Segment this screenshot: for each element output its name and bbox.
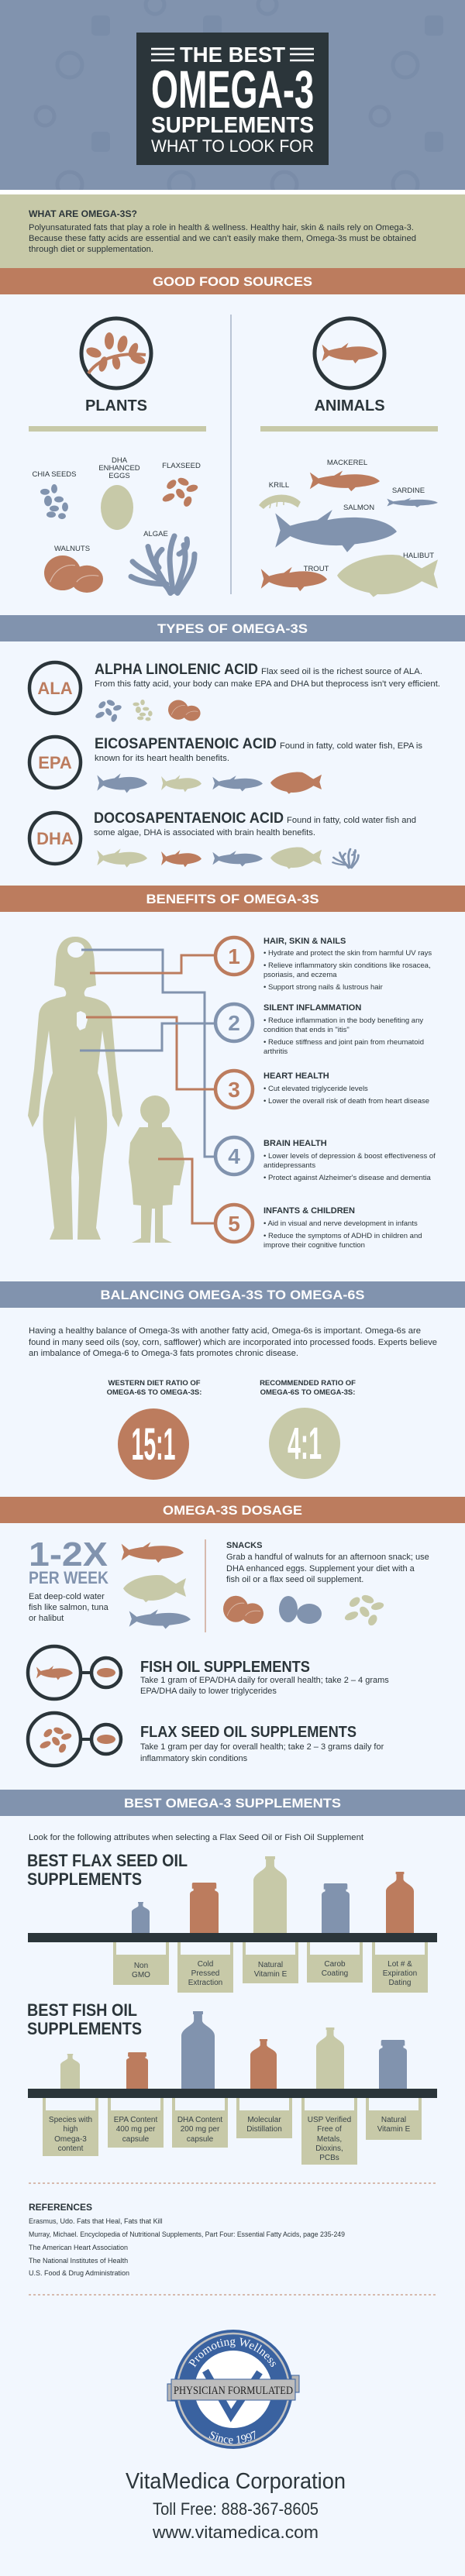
fish oil supplements: Take 1 gram of EPA/DHA daily for overall health; take 2 – 4 grams xyxy=(140,1676,389,1685)
shelf: best fish oil supplements: Dioxins, xyxy=(315,2144,343,2153)
dosage: snacks: fish oil or a flax seed oil supplement. xyxy=(226,1575,363,1584)
flax seed oil supplements xyxy=(28,1713,384,1766)
panel: animals: SARDINE xyxy=(392,487,425,495)
dosage: snacks: SNACKS xyxy=(226,1541,262,1550)
shelf: best fish oil supplements: USP Verified xyxy=(308,2116,351,2124)
dosage: fish per week: PER WEEK xyxy=(29,1568,108,1587)
panel: plants: CHIA SEEDS xyxy=(32,470,77,479)
balancing paragraph: Having a healthy balance of Omega-3s with another fatty acid, Omega-6s is important. Omega-6s are xyxy=(29,1326,421,1336)
intro: what are omega-3s: Because these fatty acids are essential and we can't easily make them, Omega-3s must be obtained xyxy=(29,234,416,243)
panel: plants xyxy=(29,318,206,593)
ratio: western diet: OMEGA-6S TO OMEGA-3S: xyxy=(107,1388,202,1397)
benefit 1: hair skin nails: HAIR, SKIN & NAILS xyxy=(264,937,346,946)
connector lines xyxy=(80,950,217,1223)
flax seed oil supplements: inflammatory skin conditions xyxy=(140,1754,248,1763)
title box: WHAT TO LOOK FOR xyxy=(151,136,314,156)
benefit 4: brain health: • Lower levels of depression & boost effectiveness of xyxy=(264,1152,436,1161)
icon: plant circle xyxy=(81,318,151,388)
benefit 5: infants & children xyxy=(215,1205,422,1250)
benefit 3: heart health: • Cut elevated triglyceride levels xyxy=(264,1085,368,1093)
type: DHA: DOCOSAPENTAENOIC ACID xyxy=(94,810,284,827)
shelf: best flax seed oil supplements: Carob xyxy=(324,1960,346,1969)
dosage: fish per week: or halibut xyxy=(29,1614,64,1623)
heading: types of omega-3s: TYPES OF OMEGA-3S xyxy=(157,621,308,636)
shelf: best fish oil supplements: Vitamin E xyxy=(377,2125,411,2134)
benefit 4: brain health: • Protect against Alzheimer's disease and dementia xyxy=(264,1174,432,1182)
footer: company contact: www.vitamedica.com xyxy=(152,2523,319,2542)
benefit 4: brain health: 4 xyxy=(228,1144,240,1168)
dosage: snacks: DHA enhanced eggs. Supplement your diet with a xyxy=(226,1564,415,1573)
heading: best omega-3 supplements: BEST OMEGA-3 SUPPLEMENTS xyxy=(124,1796,341,1811)
panel: animals: KRILL xyxy=(269,481,289,490)
panel: animals: HALIBUT xyxy=(403,552,434,560)
benefit 2: silent inflammation: condition that ends in "itis" xyxy=(264,1026,350,1034)
benefit 5: infants & children: 5 xyxy=(228,1212,240,1236)
references: The American Heart Association xyxy=(29,2244,128,2251)
ratio: western diet xyxy=(107,1379,202,1480)
shelf: best fish oil supplements: capsule xyxy=(122,2135,150,2144)
balancing paragraph: an imbalance of Omega-6 to Omega-3 fats promotes chronic disease. xyxy=(29,1349,298,1358)
type: EPA: Found in fatty, cold water fish, EPA is xyxy=(280,741,423,751)
benefit 1: hair skin nails xyxy=(215,937,432,992)
heading: good food sources: GOOD FOOD SOURCES xyxy=(153,274,312,289)
type: DHA: Found in fatty, cold water fish and xyxy=(287,816,416,825)
heading: types of omega-3s xyxy=(0,615,465,641)
panel: plants: ENHANCED xyxy=(98,464,140,473)
panel: plants: DHA xyxy=(112,456,128,465)
icon: heart xyxy=(77,1011,88,1030)
benefit 5: infants & children: • Aid in visual and nerve development in infants xyxy=(264,1219,418,1228)
heading: dosage: OMEGA-3S DOSAGE xyxy=(163,1503,302,1518)
logo: physician formulated seal: PHYSICIAN FORMULATED xyxy=(174,2385,293,2397)
logo: physician formulated seal: Promoting Wellness xyxy=(188,2337,276,2368)
type: DHA xyxy=(29,810,416,869)
references: Erasmus, Udo. Fats that Heal, Fats that Kill xyxy=(29,2217,163,2225)
benefit 3: heart health: HEART HEALTH xyxy=(264,1071,329,1081)
panel: animals xyxy=(260,318,438,597)
benefit 2: silent inflammation: • Reduce stiffness and joint pain from rheumatoid xyxy=(264,1038,424,1047)
shelf: best fish oil supplements: Molecular xyxy=(247,2116,281,2124)
benefit 2: silent inflammation xyxy=(215,1003,424,1056)
type: ALA: From this fatty acid, your body can make EPA and DHA but theprocess isn't very efficient. xyxy=(95,679,440,689)
shelf: best flax seed oil supplements: SUPPLEMENTS xyxy=(27,1869,142,1889)
benefit 5: infants & children: • Reduce the symptoms of ADHD in children and xyxy=(264,1232,422,1240)
type: DHA: DHA xyxy=(36,829,74,848)
heading: good food sources xyxy=(0,268,465,294)
references: Murray, Michael. Encyclopedia of Nutritional Supplements, Part Four: Essential Fatty Acids, page 235-249 xyxy=(29,2230,345,2238)
flax seed oil supplements: FLAX SEED OIL SUPPLEMENTS xyxy=(140,1724,356,1741)
shelf: best fish oil supplements: capsule xyxy=(187,2135,214,2144)
shelf: best flax seed oil supplements: BEST FLAX SEED OIL xyxy=(27,1851,188,1870)
header banner xyxy=(0,0,465,197)
panel: plants: WALNUTS xyxy=(54,545,90,553)
dosage: fish per week: 1-2X xyxy=(29,1536,108,1573)
shelf: best fish oil supplements xyxy=(27,2000,437,2165)
panel: animals: ANIMALS xyxy=(314,397,385,414)
references: U.S. Food & Drug Administration xyxy=(29,2269,129,2277)
references xyxy=(29,2183,437,2295)
shelf: best flax seed oil supplements: Dating xyxy=(389,1979,411,1987)
logo: physician formulated seal: Since 1997 xyxy=(209,2430,256,2444)
intro: what are omega-3s: Polyunsaturated fats that play a role in health & wellness. Healthy hair, skin & nails rely on Omega-3. xyxy=(29,223,414,232)
shelf: best fish oil supplements: SUPPLEMENTS xyxy=(27,2019,142,2038)
fish oil supplements: FISH OIL SUPPLEMENTS xyxy=(140,1659,310,1676)
ratio: western diet: WESTERN DIET RATIO OF xyxy=(108,1379,201,1388)
dosage: fish per week: Eat deep-cold water xyxy=(29,1592,105,1601)
benefit 1: hair skin nails: • Support strong nails & lustrous hair xyxy=(264,983,383,992)
dosage: fish per week: fish like salmon, tuna xyxy=(29,1603,109,1612)
panel: animals: SALMON xyxy=(343,504,374,512)
benefit 4: brain health: BRAIN HEALTH xyxy=(264,1139,327,1148)
benefit 1: hair skin nails: • Relieve inflammatory skin conditions like rosacea, xyxy=(264,961,431,970)
shelf: best fish oil supplements: DHA Content xyxy=(177,2116,222,2124)
title box xyxy=(136,33,329,165)
illustration: woman silhouette xyxy=(28,937,122,1240)
type: DHA: some algae, DHA is associated with brain health benefits. xyxy=(94,828,315,837)
shelf: best flax seed oil supplements: Pressed xyxy=(191,1969,219,1978)
intro: what are omega-3s: through diet or supplementation. xyxy=(29,245,153,254)
logo: physician formulated seal xyxy=(167,2330,299,2449)
panel: plants: PLANTS xyxy=(85,397,147,414)
benefit 1: hair skin nails: psoriasis, and eczema xyxy=(264,971,337,979)
footer: company contact: VitaMedica Corporation xyxy=(126,2469,346,2494)
shelf: best fish oil supplements: 200 mg per xyxy=(181,2125,220,2134)
benefit 1: hair skin nails: • Hydrate and protect the skin from harmful UV rays xyxy=(264,949,432,958)
panel: plants: EGGS xyxy=(108,472,130,480)
heading: benefits of omega-3s xyxy=(0,886,465,912)
shelf: best fish oil supplements: Natural xyxy=(381,2116,406,2124)
shelf: best fish oil supplements: Distillation xyxy=(246,2125,282,2134)
title box: SUPPLEMENTS xyxy=(151,113,314,138)
intro: what are omega-3s: WHAT ARE OMEGA-3S? xyxy=(29,210,137,219)
references: REFERENCES xyxy=(29,2202,92,2213)
type: EPA: EICOSAPENTAENOIC ACID xyxy=(95,736,277,752)
shelf: best fish oil supplements: BEST FISH OIL xyxy=(27,2000,137,2020)
ratio: recommended xyxy=(260,1379,356,1479)
ratio: western diet: 15:1 xyxy=(132,1419,175,1470)
ratio: recommended: OMEGA-6S TO OMEGA-3S: xyxy=(260,1388,355,1397)
type: EPA: EPA xyxy=(38,753,72,772)
dosage: snacks: Grab a handful of walnuts for an afternoon snack; use xyxy=(226,1553,429,1562)
benefit 3: heart health xyxy=(215,1071,429,1108)
benefit 2: silent inflammation: SILENT INFLAMMATION xyxy=(264,1003,361,1013)
shelf: best fish oil supplements: Omega-3 xyxy=(54,2135,87,2144)
footer: company contact xyxy=(126,2469,346,2542)
shelf: best flax seed oil supplements: Non xyxy=(134,1962,148,1970)
shelf: best fish oil supplements: 400 mg per xyxy=(116,2125,156,2134)
benefit 5: infants & children: INFANTS & CHILDREN xyxy=(264,1206,355,1216)
benefit 2: silent inflammation: 2 xyxy=(228,1011,240,1035)
icon: brain xyxy=(67,942,84,958)
shelf: best fish oil supplements: high xyxy=(64,2125,78,2134)
shelf: best fish oil supplements: content xyxy=(58,2144,84,2153)
type: EPA xyxy=(29,736,423,794)
fish oil supplements xyxy=(28,1646,389,1699)
type: ALA: Flax seed oil is the richest source of ALA. xyxy=(261,667,422,676)
fish oil supplements: EPA/DHA daily to lower triglycerides xyxy=(140,1687,277,1696)
heading: best omega-3 supplements xyxy=(0,1790,465,1816)
shelf: best flax seed oil supplements: Natural xyxy=(258,1961,283,1969)
ratio: recommended: 4:1 xyxy=(288,1419,322,1469)
title box: THE BEST xyxy=(180,43,285,67)
panel: plants: FLAXSEED xyxy=(162,462,201,470)
benefit 5: infants & children: improve their cognitive function xyxy=(264,1241,365,1250)
panel: animals: TROUT xyxy=(304,565,329,573)
balancing paragraph: found in many seed oils (soy, corn, safflower) which are incorporated into processed foods. Experts believe xyxy=(29,1338,437,1347)
intro: what are omega-3s xyxy=(0,190,465,268)
type: ALA: ALPHA LINOLENIC ACID xyxy=(95,662,258,678)
balancing paragraph xyxy=(29,1326,437,1358)
heading: dosage xyxy=(0,1497,465,1523)
benefit 4: brain health xyxy=(215,1137,436,1182)
shelf: best flax seed oil supplements: Extraction xyxy=(188,1979,222,1987)
dosage: snacks xyxy=(223,1541,429,1627)
ratio: recommended: RECOMMENDED RATIO OF xyxy=(260,1379,356,1388)
type: ALA: ALA xyxy=(37,679,73,698)
shelf: best flax seed oil supplements: GMO xyxy=(132,1971,150,1979)
shelf: best fish oil supplements: Metals, xyxy=(317,2135,342,2144)
shelf: best flax seed oil supplements: Cold xyxy=(198,1960,213,1969)
shelf: best flax seed oil supplements: Lot # & xyxy=(388,1960,412,1969)
title box: OMEGA-3 xyxy=(151,60,314,119)
benefit 3: heart health: 3 xyxy=(228,1078,240,1102)
heading: balancing xyxy=(0,1281,465,1308)
benefit 1: hair skin nails: 1 xyxy=(228,944,240,968)
type: ALA xyxy=(29,662,440,723)
benefit 3: heart health: • Lower the overall risk of death from heart disease xyxy=(264,1097,429,1106)
panel: animals: MACKEREL xyxy=(327,459,367,467)
benefit 4: brain health: antidepressants xyxy=(264,1161,315,1170)
shelf: best fish oil supplements: EPA Content xyxy=(114,2116,157,2124)
shelf: best flax seed oil supplements: Expiration xyxy=(383,1969,417,1978)
shelf: best fish oil supplements: PCBs xyxy=(319,2154,339,2162)
panel: plants: ALGAE xyxy=(143,530,168,538)
flax seed oil supplements: Take 1 gram per day for overall health; take 2 – 3 grams daily for xyxy=(140,1742,384,1752)
benefit 2: silent inflammation: arthritis xyxy=(264,1047,288,1056)
shelf: best fish oil supplements: Species with xyxy=(49,2116,92,2124)
type: EPA: known for its heart health benefits. xyxy=(95,754,229,763)
shelf: best flax seed oil supplements: Coating xyxy=(322,1969,348,1978)
footer: company contact: Toll Free: 888-367-8605 xyxy=(153,2499,319,2519)
heading: balancing: BALANCING OMEGA-3S TO OMEGA-6S xyxy=(101,1288,364,1302)
shelf: best flax seed oil supplements: Vitamin E xyxy=(254,1970,288,1979)
shelf: best flax seed oil supplements xyxy=(27,1851,437,1993)
references: The National Institutes of Health xyxy=(29,2257,128,2265)
benefit 2: silent inflammation: • Reduce inflammation in the body benefiting any xyxy=(264,1016,423,1025)
heading: benefits of omega-3s: BENEFITS OF OMEGA-3S xyxy=(146,892,319,906)
dosage: fish per week xyxy=(29,1536,191,1629)
text: Look for the following attributes when selecting a Flax Seed Oil or Fish Oil Supplement xyxy=(29,1833,363,1842)
illustration: child silhouette xyxy=(129,1095,184,1243)
shelf: best fish oil supplements: Free of xyxy=(317,2125,342,2134)
